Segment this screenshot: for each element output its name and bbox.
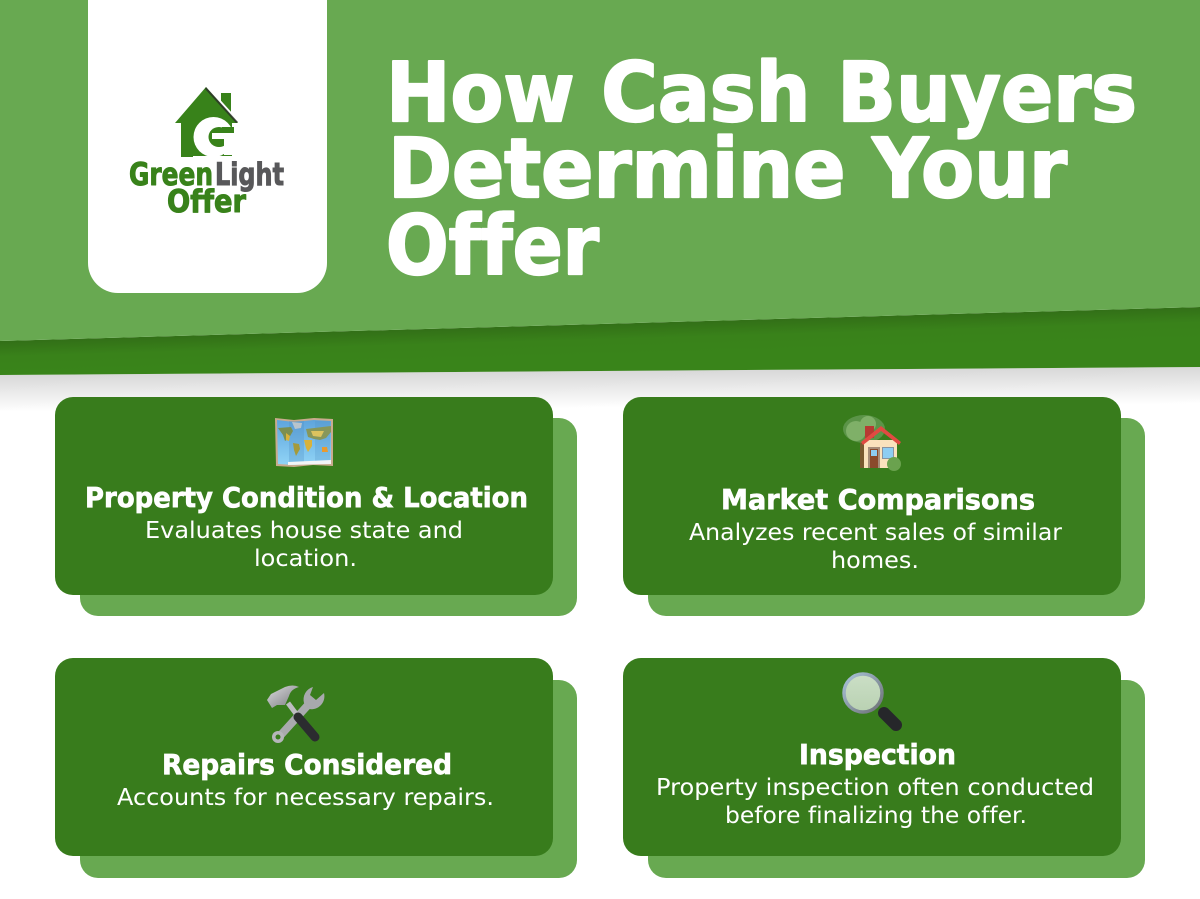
title: Determine Your: [388, 122, 1068, 217]
body text: [145, 516, 463, 572]
panel: inspection: [623, 658, 1145, 878]
body text: Analyzes recent sales of similar: [689, 518, 1062, 546]
title: [386, 46, 1137, 294]
heading: Property Condition & Location: [85, 481, 528, 514]
header shadow: [0, 367, 1200, 412]
body text: Accounts for necessary repairs.: [117, 783, 494, 811]
body text: before finalizing the offer.: [725, 801, 1027, 829]
icon: house with tree: [843, 415, 901, 471]
body text: Evaluates house state and: [145, 516, 463, 544]
icon: magnifying glass: [844, 674, 896, 725]
logo wordmark: Green: [129, 157, 213, 193]
logo word Light: Light: [215, 157, 284, 193]
panel: repairs considered: [55, 658, 577, 878]
heading: Inspection: [799, 738, 956, 771]
logo wordmark: [129, 157, 247, 220]
title: How Cash Buyers: [386, 46, 1137, 141]
panel: market comparisons: [623, 397, 1145, 616]
panel: property condition and location: [55, 397, 577, 616]
header light panel: [0, 0, 1200, 341]
heading: Market Comparisons: [721, 483, 1035, 516]
body text: location.: [254, 544, 357, 572]
logo wordmark: Offer: [167, 184, 247, 220]
title: Offer: [386, 199, 599, 294]
body text: homes.: [831, 546, 919, 574]
body text: [656, 773, 1094, 829]
icon: world map: [275, 418, 333, 467]
icon: hammer and wrench: [267, 686, 324, 743]
logo card: [88, 0, 327, 293]
header dark band: [0, 307, 1200, 375]
logo house icon: [175, 84, 242, 162]
body text: Property inspection often conducted: [656, 773, 1094, 801]
body text: [689, 518, 1062, 574]
heading: Repairs Considered: [162, 748, 452, 781]
